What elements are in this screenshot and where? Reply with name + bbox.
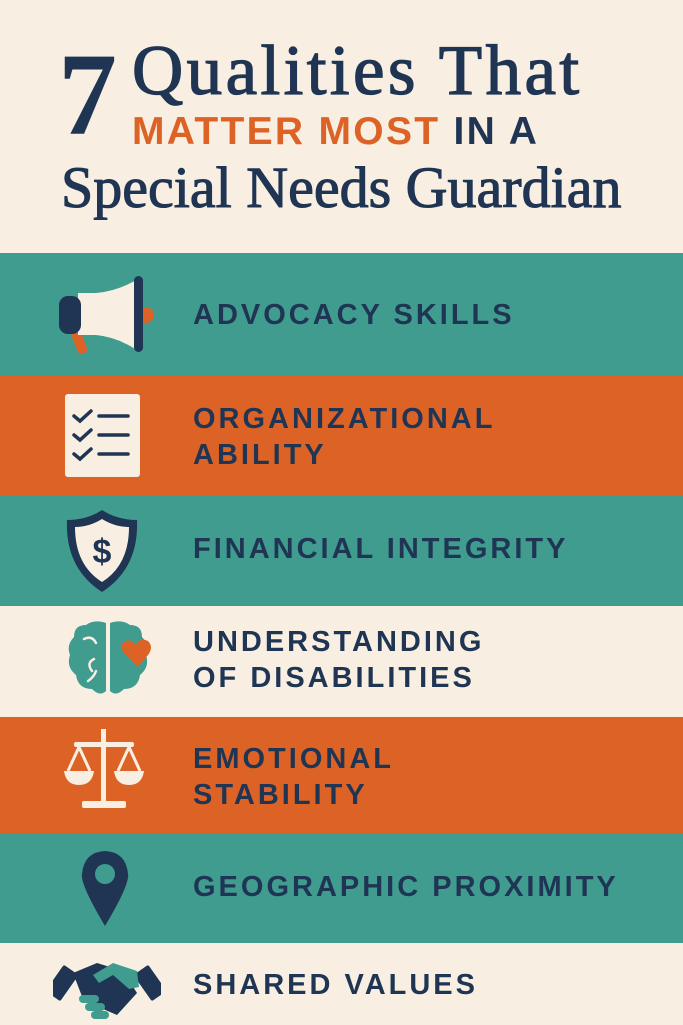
label: OF DISABILITIES — [193, 662, 475, 694]
title line 3: Special Needs Guardian — [61, 155, 621, 220]
label: STABILITY — [193, 779, 368, 811]
icon: brain heart — [68, 621, 151, 694]
label — [193, 403, 495, 471]
label: ORGANIZATIONAL — [193, 403, 495, 435]
title number 7: 7 — [58, 29, 117, 160]
icon: handshake — [53, 963, 161, 1019]
panel: financial integrity — [0, 495, 683, 606]
panel: advocacy skills — [0, 253, 683, 375]
title line 2: MATTER MOST IN A — [132, 110, 539, 153]
label: FINANCIAL INTEGRITY — [193, 533, 568, 565]
panel: emotional stability — [0, 717, 683, 833]
panel: geographic proximity — [0, 833, 683, 943]
title — [58, 29, 622, 220]
label: ADVOCACY SKILLS — [193, 299, 515, 331]
panel: understanding of disabilities — [0, 606, 683, 717]
icon: map pin — [82, 851, 128, 926]
label — [193, 743, 394, 811]
label — [193, 626, 484, 694]
icon: shield dollar — [66, 510, 138, 592]
label: GEOGRAPHIC PROXIMITY — [193, 871, 619, 903]
panel: shared values — [0, 943, 683, 1024]
icon: scales — [64, 729, 144, 808]
label: EMOTIONAL — [193, 743, 394, 775]
panel: organizational ability — [0, 375, 683, 495]
icon: checklist — [65, 394, 140, 477]
label: ABILITY — [193, 439, 327, 471]
title line 1: Qualities That — [132, 32, 583, 110]
icon: shield dollar: $ — [93, 533, 112, 571]
icon: megaphone — [59, 276, 154, 353]
label: SHARED VALUES — [193, 969, 478, 1001]
label: UNDERSTANDING — [193, 626, 484, 658]
